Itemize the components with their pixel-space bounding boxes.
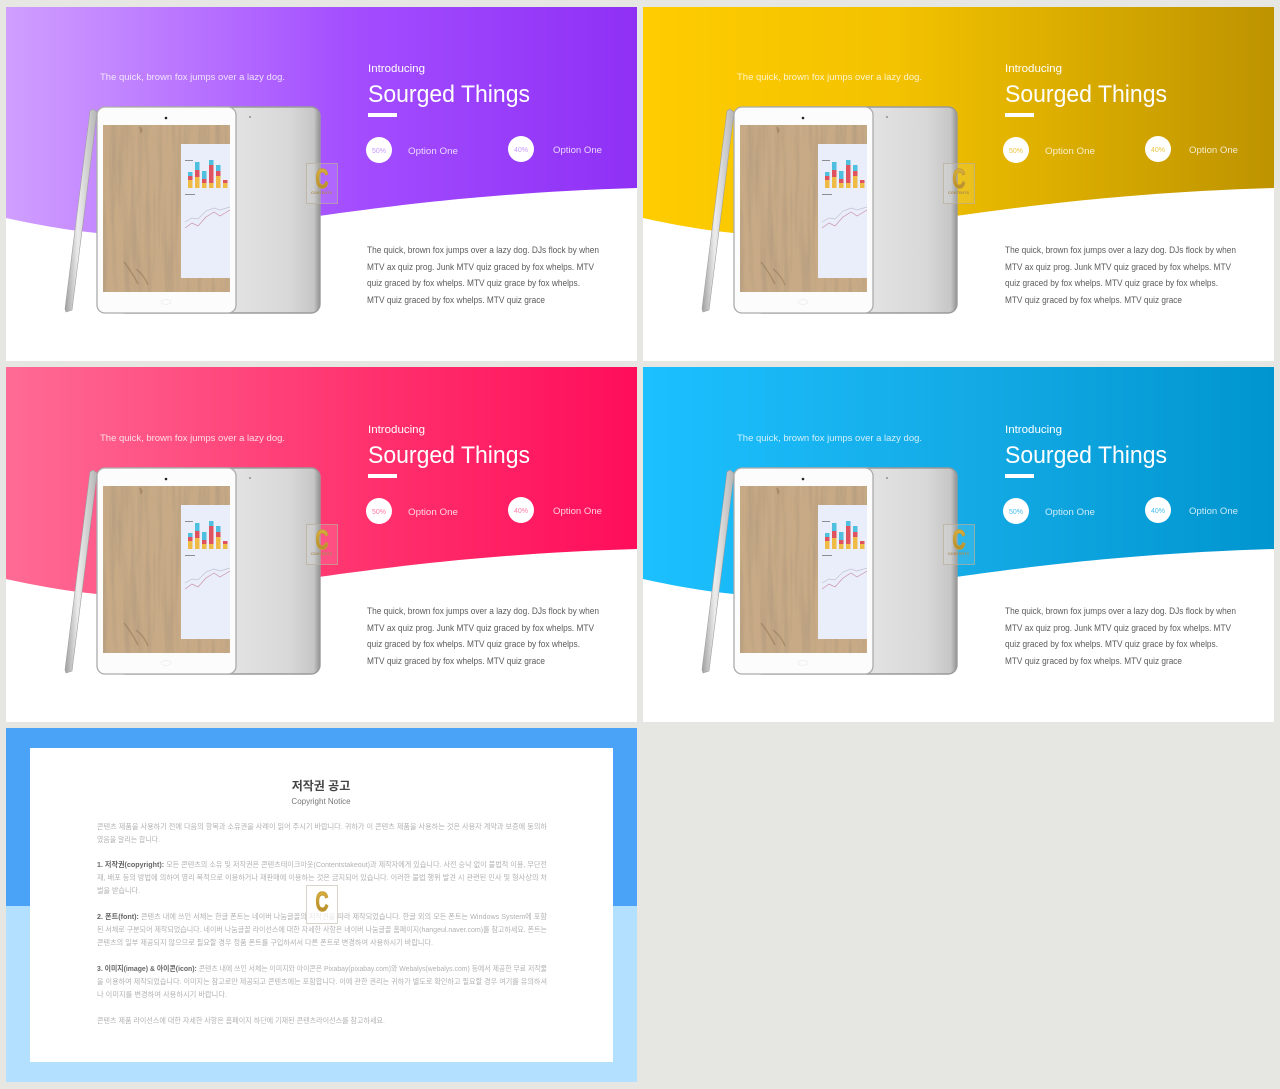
- option 40 percent: 40%: [514, 147, 528, 154]
- watermark logo: [944, 524, 974, 564]
- watermark logo: CONTENTS: [948, 190, 969, 195]
- notice title: 저작권 공고: [292, 778, 350, 793]
- body text: [367, 606, 599, 666]
- watermark logo: [306, 524, 338, 564]
- body text: MTV quiz graced by fox whelps. MTV quiz grace: [367, 656, 545, 666]
- option 40 percent: 40%: [1151, 508, 1165, 515]
- image: tablet mockup with chart: [702, 107, 957, 313]
- watermark logo: C: [952, 163, 966, 194]
- option 50 percent: 50%: [1009, 509, 1023, 516]
- eyebrow label: Introducing: [1005, 424, 1062, 436]
- option 40 percent: [508, 136, 602, 162]
- body text: quiz graced by fox whelps. MTV quiz grace by fox whelps.: [367, 278, 580, 288]
- section 2: font: 2. 폰트(font): 콘텐츠 내에 쓰인 서체는 한글 폰트는 네이버 나눔글꼴의 저작권을 따라 제작되었습니다. 한글 외의 모든 폰트는 Windows System에 포함: [97, 911, 547, 921]
- caption: The quick, brown fox jumps over a lazy dog.: [737, 433, 922, 444]
- option 50 percent: [1003, 137, 1095, 163]
- option 40 percent: Option One: [553, 506, 602, 517]
- body text: MTV quiz graced by fox whelps. MTV quiz grace: [367, 295, 545, 305]
- caption: The quick, brown fox jumps over a lazy dog.: [100, 72, 285, 83]
- option 50 percent: Option One: [408, 146, 458, 157]
- panel: yellow slide: [643, 7, 1274, 361]
- section 2: font: 콘텐츠의 일부 제공되지 않으므로 필요할 경우 정품 폰트를 구입하셔서 다른 폰트로 변경하여 사용하시기 바랍니다.: [97, 937, 433, 947]
- option 40 percent: [1145, 497, 1238, 523]
- section 2: font: [97, 911, 547, 947]
- option 50 percent: Option One: [408, 507, 458, 518]
- watermark logo: [944, 163, 974, 204]
- watermark logo: C: [316, 524, 328, 555]
- section 3: image and icon: [97, 963, 547, 999]
- caption: The quick, brown fox jumps over a lazy dog.: [100, 433, 285, 444]
- option 40 percent: Option One: [553, 145, 602, 156]
- option 50 percent: Option One: [1045, 146, 1095, 157]
- body text: [1005, 245, 1236, 305]
- body text: [367, 245, 599, 305]
- section 1: copyright: 1. 저작권(copyright): 모든 콘텐츠의 소유 및 저작권은 콘텐츠테이크아웃(Contentstakeout)과 제작자에게 있습니다. 사전 승낙 없이 불법적 이용, 무단전: [97, 859, 547, 869]
- section 1: copyright: 재, 배포 등의 방법에 의하여 영리 목적으로 이용하거나 재판매에 이용하는 것은 금지되어 있습니다. 이러한 불법 행위 발견 시 관련된 민사 및 형사상의 처: [97, 872, 547, 882]
- panel: blue slide: [643, 367, 1274, 722]
- eyebrow label: Introducing: [368, 63, 425, 75]
- accent bar: [368, 474, 397, 478]
- watermark logo: C: [316, 163, 328, 194]
- panel: pink slide: [6, 367, 637, 722]
- watermark logo: CONTENTS: [311, 190, 332, 195]
- option 40 percent: 40%: [1151, 147, 1165, 154]
- body text: quiz graced by fox whelps. MTV quiz grace by fox whelps.: [1005, 278, 1218, 288]
- accent bar: [1005, 113, 1034, 117]
- eyebrow label: Introducing: [368, 424, 425, 436]
- heading: Sourged Things: [1005, 81, 1167, 108]
- watermark logo: CONTENTS: [311, 551, 332, 556]
- watermark logo: CONTENTS: [948, 551, 969, 556]
- body text: The quick, brown fox jumps over a lazy dog. DJs flock by when: [367, 606, 599, 616]
- watermark logo: C: [316, 886, 328, 917]
- notice card: [30, 748, 613, 1062]
- option 50 percent: 50%: [1009, 148, 1023, 155]
- intro paragraph: 콘텐츠 제품을 사용하기 전에 다음의 항목과 소유권을 사례이 읽어 주시기 바랍니다. 귀하가 이 콘텐츠 제품을 사용하는 것은 사용자 계약과 보증에 동의하: [97, 821, 547, 831]
- body text: MTV ax quiz prog. Junk MTV quiz graced by fox whelps. MTV: [367, 262, 594, 272]
- image: tablet mockup with chart: [65, 107, 320, 313]
- panel: purple slide: [6, 7, 637, 361]
- image: tablet mockup with chart: [702, 468, 957, 674]
- body text: MTV quiz graced by fox whelps. MTV quiz grace: [1005, 295, 1182, 305]
- option 50 percent: [1003, 498, 1095, 524]
- option 40 percent: 40%: [514, 508, 528, 515]
- panel: copyright notice: [6, 728, 637, 1082]
- body text: The quick, brown fox jumps over a lazy dog. DJs flock by when: [1005, 245, 1236, 255]
- option 50 percent: 50%: [372, 509, 386, 516]
- option 50 percent: Option One: [1045, 507, 1095, 518]
- section 2: font: 된 서체로 구분되어 제작되었습니다. 네이버 나눔글꼴 라이선스에 대한 자세한 사항은 네이버 나눔글꼴 홈페이지(hangeul.naver.com)를 참고하세요. 폰트는: [97, 924, 547, 934]
- heading: Sourged Things: [1005, 442, 1167, 469]
- option 40 percent: Option One: [1189, 506, 1238, 517]
- body text: quiz graced by fox whelps. MTV quiz grace by fox whelps.: [367, 639, 580, 649]
- heading: Sourged Things: [368, 442, 530, 469]
- intro paragraph: 였음을 알리는 합니다.: [97, 834, 160, 844]
- body text: quiz graced by fox whelps. MTV quiz grace by fox whelps.: [1005, 639, 1218, 649]
- option 50 percent: [366, 137, 458, 163]
- body text: MTV ax quiz prog. Junk MTV quiz graced by fox whelps. MTV: [1005, 262, 1231, 272]
- eyebrow label: Introducing: [1005, 63, 1062, 75]
- section 3: image and icon: 나 이미지를 변경하여 사용하시기 바랍니다.: [97, 989, 227, 999]
- notice subtitle: Copyright Notice: [291, 797, 351, 806]
- body text: MTV quiz graced by fox whelps. MTV quiz grace: [1005, 656, 1182, 666]
- body text: MTV ax quiz prog. Junk MTV quiz graced by fox whelps. MTV: [367, 623, 594, 633]
- section 3: image and icon: 3. 이미지(image) & 아이콘(icon): 콘텐츠 내에 쓰인 서체는 이미지와 아이콘은 Pixabay(pixabay.com)와 Webalys(webalys.com) 등에서 제공한 무료 저작물: [97, 963, 547, 973]
- option 40 percent: [1145, 136, 1238, 162]
- body text: The quick, brown fox jumps over a lazy dog. DJs flock by when: [367, 245, 599, 255]
- accent bar: [368, 113, 397, 117]
- accent bar: [1005, 474, 1034, 478]
- caption: The quick, brown fox jumps over a lazy dog.: [737, 72, 922, 83]
- option 40 percent: [508, 497, 602, 523]
- body text: [1005, 606, 1236, 666]
- section 1: copyright: [97, 859, 547, 895]
- body text: MTV ax quiz prog. Junk MTV quiz graced by fox whelps. MTV: [1005, 623, 1231, 633]
- option 50 percent: [366, 498, 458, 524]
- section 1: copyright: 벌을 받습니다.: [97, 885, 140, 895]
- intro paragraph: [97, 821, 547, 844]
- closing note: 콘텐츠 제품 라이선스에 대한 자세한 사항은 홈페이지 하단에 기재된 콘텐츠라이선스를 참고하세요.: [97, 1015, 385, 1025]
- heading: Sourged Things: [368, 81, 530, 108]
- body text: The quick, brown fox jumps over a lazy dog. DJs flock by when: [1005, 606, 1236, 616]
- image: tablet mockup with chart: [65, 468, 320, 674]
- watermark logo: C: [952, 524, 966, 555]
- section 3: image and icon: 을 이용하여 제작되었습니다. 이미지는 참고로만 제공되고 콘텐츠에는 포함합니다. 이에 관한 권리는 귀하가 별도로 확인하고 필요할 경우 여기를 유의하셔: [97, 976, 547, 986]
- option 50 percent: 50%: [372, 148, 386, 155]
- watermark logo: [306, 163, 338, 204]
- watermark logo: [306, 886, 338, 924]
- option 40 percent: Option One: [1189, 145, 1238, 156]
